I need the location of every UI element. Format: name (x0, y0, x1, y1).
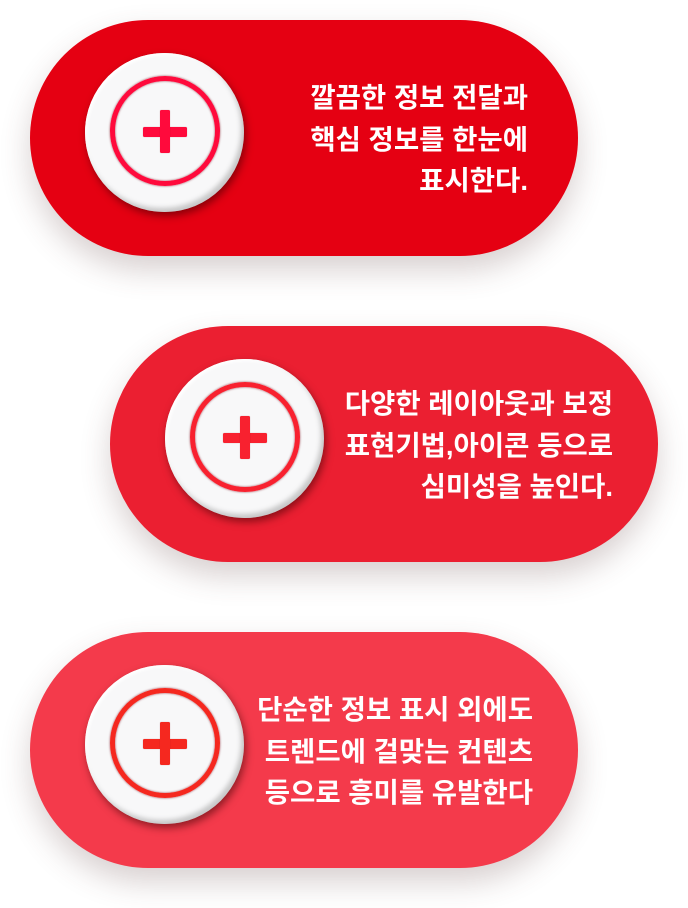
text block 1: 표시한다. (419, 165, 528, 196)
text block 1: 깔끔한 정보 전달과 (310, 82, 528, 113)
text block 2: 다양한 레이아웃과 보정 (345, 388, 613, 419)
icon: plus button 3 (85, 665, 244, 824)
panel: pill 1 (30, 20, 578, 256)
icon: plus button 2 (165, 359, 324, 518)
text block 3 (257, 694, 533, 808)
text block 2 (345, 388, 613, 502)
text block 2: 심미성을 높인다. (421, 471, 613, 502)
text block 2: 표현기법,아이콘 등으로 (345, 430, 613, 460)
text block 1: 핵심 정보를 한눈에 (310, 124, 528, 154)
icon: plus button 1 (85, 53, 244, 212)
panel: pill 3 (30, 632, 578, 868)
panel: pill 2 (110, 326, 658, 562)
text block 3: 등으로 흥미를 유발한다 (265, 777, 533, 808)
text block 3: 트렌드에 걸맞는 컨텐츠 (265, 736, 533, 766)
text block 3: 단순한 정보 표시 외에도 (257, 694, 533, 725)
text block 1 (310, 82, 528, 196)
